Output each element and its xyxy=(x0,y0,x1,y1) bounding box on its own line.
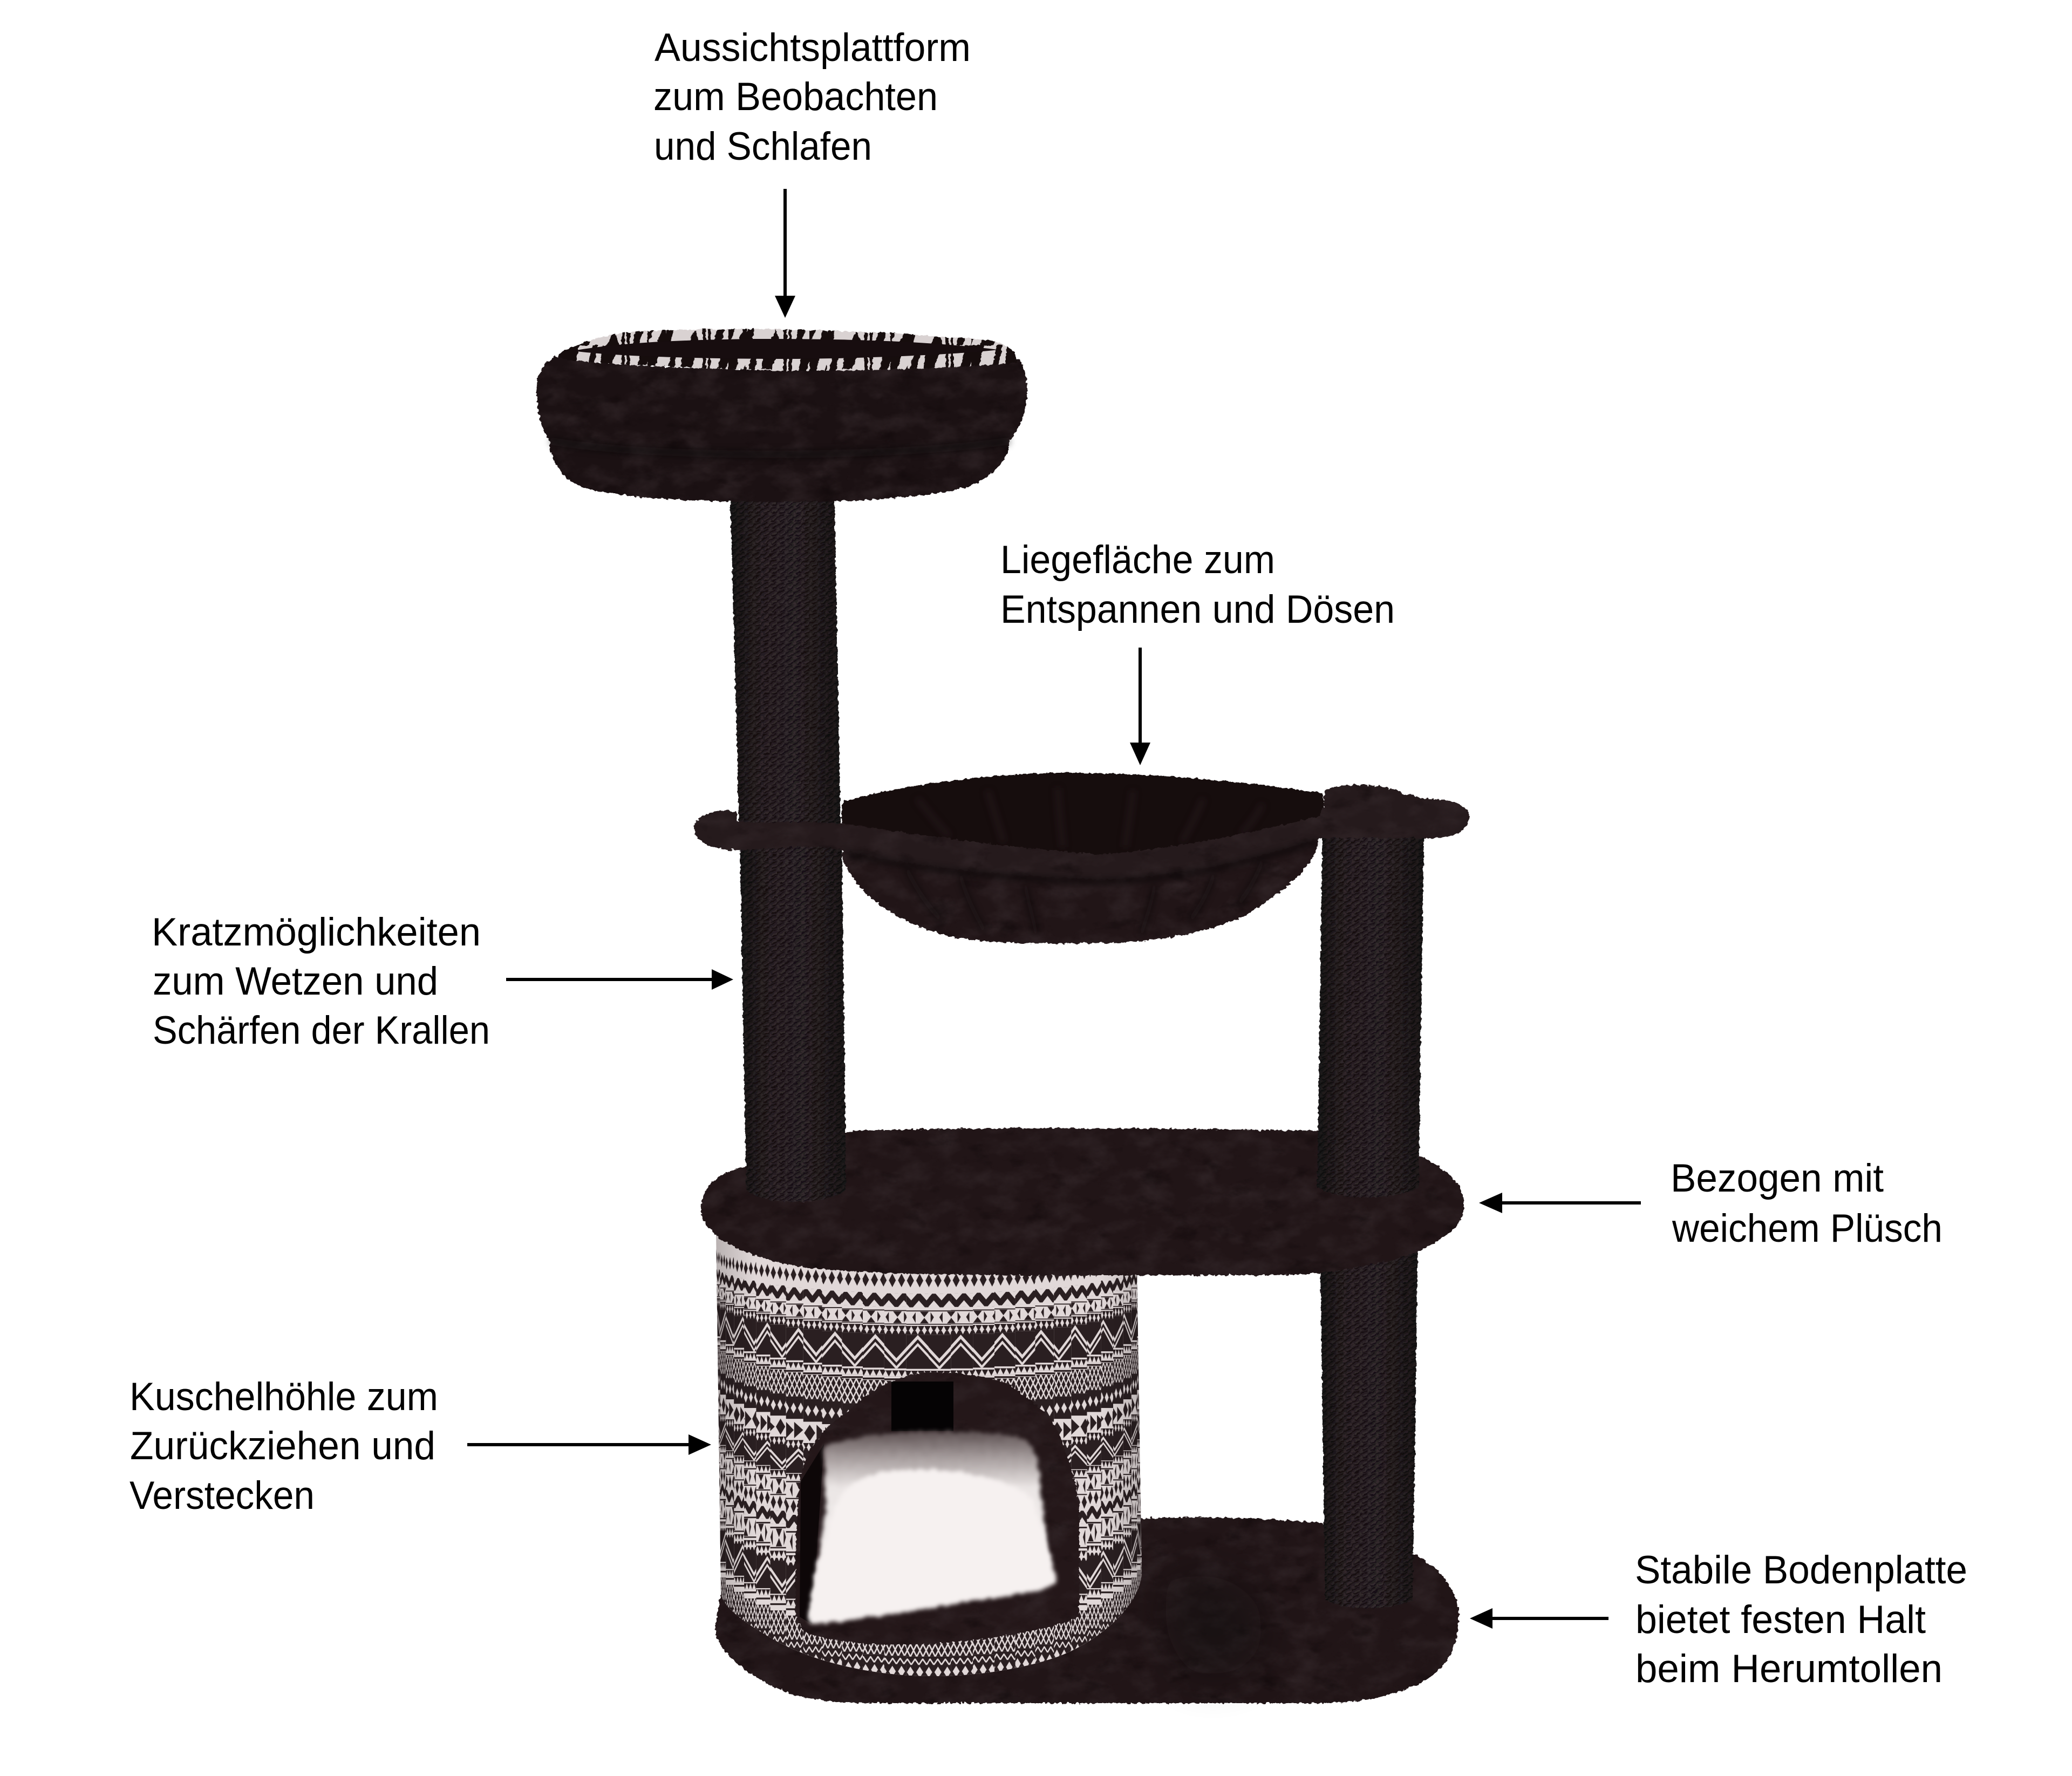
callout: Kratzmöglichkeiten: Kratzmöglichkeiten xyxy=(152,910,481,954)
callout: Kuschelhöhle xyxy=(130,1375,438,1518)
callout: Aussichtsplattform: und Schlafen xyxy=(654,125,872,168)
base plate xyxy=(715,1518,1459,1703)
callout: Liegefläche: Liegefläche zum xyxy=(1000,538,1275,582)
lower right post xyxy=(1320,1230,1418,1608)
inner left shadow xyxy=(800,1444,824,1624)
top viewing platform bowl xyxy=(537,329,1027,502)
callout: Aussichtsplattform: Aussichtsplattform xyxy=(655,26,971,70)
patterned cave cylinder xyxy=(716,1235,1142,1676)
hammock ring and front lip xyxy=(694,785,1469,880)
hammock basket xyxy=(842,809,1320,943)
left post lower section xyxy=(740,842,846,1202)
hammock basket folds xyxy=(906,861,1263,934)
white cushion xyxy=(809,1470,1057,1624)
callout: Kuschelhöhle: Kuschelhöhle zum xyxy=(130,1375,438,1419)
callout: Stabile Bodenplatte: Stabile Bodenplatte xyxy=(1635,1548,1967,1592)
callout: Aussichtsplattform: zum Beobachten xyxy=(653,75,938,119)
bowl body xyxy=(537,356,1027,502)
callout: Kratzmöglichkeiten xyxy=(152,910,490,1052)
arrow: to hammock xyxy=(1130,648,1150,765)
arrow: to shelf xyxy=(1479,1193,1641,1213)
cave arch opening xyxy=(795,1372,1079,1645)
patterned rim xyxy=(557,329,1017,371)
hammock inner folds xyxy=(917,788,1263,847)
cushion back xyxy=(809,1431,1049,1619)
callout: Kratzmöglichkeiten: Schärfen der Krallen xyxy=(153,1009,490,1052)
callout: Stabile Bodenplatte: bietet festen Halt xyxy=(1635,1598,1926,1642)
hammock inner surface xyxy=(842,773,1325,856)
arrow: to base plate xyxy=(1470,1608,1608,1629)
arrow: to cave xyxy=(467,1434,711,1455)
middle shelf xyxy=(701,1128,1464,1275)
callout: Bezogen mit Plüsch: Bezogen mit xyxy=(1671,1156,1884,1200)
callout: Bezogen mit Plüsch: weichem Plüsch xyxy=(1672,1207,1942,1250)
callout: Stabile Bodenplatte xyxy=(1635,1548,1967,1691)
callout: Stabile Bodenplatte: beim Herumtollen xyxy=(1635,1647,1942,1691)
callout: Kratzmöglichkeiten: zum Wetzen und xyxy=(153,960,438,1003)
bowl inner opening xyxy=(573,339,998,359)
arrow: to scratching post xyxy=(506,969,733,990)
callout: Kuschelhöhle: Verstecken xyxy=(130,1474,315,1518)
callout: Aussichtsplattform xyxy=(653,26,971,168)
cat tree product photo xyxy=(537,329,1469,1703)
cylinder pattern wrap xyxy=(716,1235,1142,1676)
left post upper section xyxy=(730,486,841,831)
hammock lip crease xyxy=(844,842,1317,882)
hanging strap xyxy=(891,1382,953,1431)
callout: Kuschelhöhle: Zurückziehen und xyxy=(130,1424,435,1468)
right post upper section xyxy=(1317,826,1424,1197)
hammock lying surface xyxy=(694,773,1469,943)
callout: Liegefläche: Entspannen und Dösen xyxy=(1000,588,1395,631)
callout: Liegefläche xyxy=(1000,538,1395,631)
bowl crease xyxy=(550,441,1010,454)
callout: Bezogen mit Plüsch xyxy=(1671,1156,1942,1250)
base plate shadow patch xyxy=(1164,1575,1263,1676)
arrow: to platform xyxy=(775,189,795,318)
